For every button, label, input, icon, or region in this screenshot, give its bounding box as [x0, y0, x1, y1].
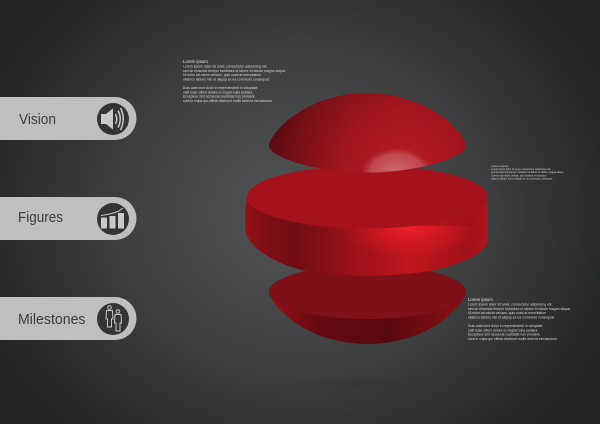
text block: bottom right: sed do eiusmod tempor incididunt ut labore et dolore magna aliqua. — [468, 307, 571, 311]
text block: bottom right: Excepteur sint occaecat cupidatat non proident, — [468, 333, 540, 337]
text block: bottom right — [468, 297, 571, 341]
label: Milestones — [0, 297, 136, 340]
text block: middle right: Lorem ipsum dolor sit amet, consectetur adipisicing elit, — [491, 168, 551, 171]
text block: top left — [183, 59, 286, 103]
text block: bottom right: Lorem ipsum — [468, 297, 493, 302]
text block: bottom right: Ut enim ad minim veniam, quis nostrud exercitation — [468, 311, 546, 315]
text block: middle right — [491, 164, 564, 180]
text block: top left: sunt in culpa qui officia deserunt mollit anim id est laborum — [183, 99, 272, 103]
text block: bottom right: sunt in culpa qui officia deserunt mollit anim id est laborum — [468, 337, 557, 341]
text block: middle right: ullamco laboris nisi ut aliquip ex ea commodo consequat. — [491, 178, 553, 180]
icon: bar chart — [97, 203, 129, 235]
text block: bottom right: Lorem ipsum dolor sit amet, consectetur adipisicing elit, — [468, 302, 552, 306]
sphere slice: middle band — [245, 166, 488, 276]
text block: top left: velit esse cillum dolore eu fugiat nulla pariatur. — [183, 90, 253, 94]
text block: middle right: sed do eiusmod tempor incididunt ut labore et dolore magna aliqua. — [491, 171, 564, 174]
text block: middle right: Ut enim ad minim veniam, quis nostrud exercitation — [491, 174, 547, 177]
icon: two people — [97, 303, 129, 335]
label text: Figures: Figures — [18, 209, 63, 226]
text block: middle right: Lorem ipsum — [491, 164, 509, 168]
text block: top left: Ut enim ad minim veniam, quis nostrud exercitation — [183, 73, 261, 77]
icon: speaker — [97, 103, 129, 135]
text block: bottom right: velit esse cillum dolore eu fugiat nulla pariatur. — [468, 328, 538, 332]
text block: top left: Duis aute irure dolor in reprehenderit in voluptate — [183, 86, 258, 90]
label text: Vision: Vision — [19, 111, 56, 128]
text block: top left: Lorem ipsum dolor sit amet, consectetur adipisicing elit, — [183, 64, 267, 68]
text block: top left: sed do eiusmod tempor incididunt ut labore et dolore magna aliqua. — [183, 69, 286, 73]
sphere slice: top cap — [269, 93, 466, 172]
label text: Milestones: Milestones — [18, 311, 86, 328]
text block: top left: Lorem ipsum — [183, 59, 208, 64]
sphere slice: bottom cap — [269, 265, 466, 344]
label: Figures — [0, 197, 136, 240]
text block: top left: Excepteur sint occaecat cupidatat non proident, — [183, 95, 255, 99]
label: Vision — [0, 97, 136, 140]
text block: top left: ullamco laboris nisi ut aliquip ex ea commodo consequat. — [183, 78, 270, 82]
text block: bottom right: Duis aute irure dolor in reprehenderit in voluptate — [468, 324, 543, 328]
text block: bottom right: ullamco laboris nisi ut aliquip ex ea commodo consequat. — [468, 316, 555, 320]
